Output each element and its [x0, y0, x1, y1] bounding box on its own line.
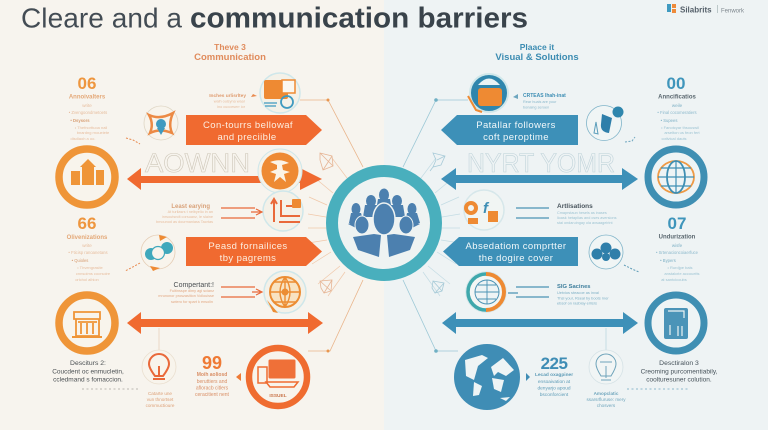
arrow: 225 pointer [526, 373, 530, 381]
panel: left item 06: 06 [78, 74, 96, 93]
icon: small cube lower left [320, 280, 332, 293]
icon: left building ring [59, 149, 115, 205]
icon: right globe ring [648, 149, 704, 205]
text block: description 2: Coucdent oc enmucletin, [52, 368, 124, 376]
callout: left least earying: inrsoutsndt corsuanz, le slaine [162, 215, 213, 219]
stat: 225: denyarjo apoud [537, 386, 571, 392]
radiating lines [308, 158, 460, 296]
icon: top right globe folder [468, 74, 508, 112]
banner: left lower [186, 237, 322, 266]
stat: 99: Moih aoliosd [197, 372, 227, 378]
icon: left institution ring [59, 295, 115, 351]
right column heading [495, 42, 579, 63]
panel: right item 07: anstalcrie accoueits [664, 271, 700, 276]
panel: right item 00: Anncificatios [658, 94, 696, 100]
callout: top left label: Inches urlisrltey [209, 93, 246, 99]
connector: left bulb [158, 328, 160, 350]
icon: right lower clouds [589, 235, 623, 269]
left column heading [194, 42, 266, 63]
divider: description 2 [82, 388, 140, 390]
right column heading: Plaace it [520, 42, 554, 52]
connector: bottom left [308, 280, 363, 352]
callout: top right label: CRTEAS lhah-inat [523, 93, 566, 99]
callout: left competent: swiero for spart k ensolin [171, 300, 213, 304]
icon: small cube upper right [430, 153, 445, 171]
panel: right item 07: • Rurdjpe bals [668, 265, 692, 270]
callout: right artifications: Cmaprstaun hesels as inases [557, 211, 607, 215]
panel: right item 00: weile [672, 103, 683, 108]
logo [667, 4, 745, 14]
outline lettering right: NYRT YOMR [467, 148, 615, 178]
arrow: left competent [221, 287, 262, 297]
text block: description 3 [641, 360, 718, 384]
text block: right bulb caption [586, 391, 626, 408]
callout: top left label: walh oulsyna waar [214, 100, 246, 104]
stat: 225: Lecad oxagpiner [535, 372, 573, 378]
icon: orange tree badge [258, 149, 302, 193]
panel: left item 06: • Dsysors [70, 118, 90, 123]
callout: right artifications: stai ondaruingay ola axsaageirint [557, 221, 613, 225]
title: Cleare and a [21, 2, 182, 34]
callout: right sig sacines [557, 284, 609, 306]
arrow: 99 pointer [236, 373, 241, 381]
panel: right item 00: cotivical dauts [661, 136, 687, 141]
icon: dashed pointer right lower [624, 265, 639, 272]
panel: right item 07: Undurization [659, 234, 696, 240]
text block: right bulb caption: Amopclatic [594, 391, 619, 396]
callout: right artifications: lioask hetaplias and cses aversions [557, 216, 617, 220]
text block: right bulb caption: chosvers [597, 403, 616, 408]
callout: left least earying: bmounod as dourmaniass Tacrtas [156, 220, 213, 224]
callout: top right label: Rear huals are your [523, 100, 557, 104]
callout: right sig sacines: Thsi your, Rseal by boots rner [557, 296, 609, 300]
icon: right badge [586, 106, 624, 140]
panel: left item 06: • Zvengoondmetoets [69, 110, 107, 115]
stat: 225: bsconforcient [540, 392, 569, 398]
callout: left competent: Compertant:! [174, 282, 214, 289]
panel: right item 07: • Bypers [660, 258, 676, 263]
panel: left item 06 [69, 74, 110, 141]
icon: laptop ring [249, 348, 307, 406]
right column heading: Visual & Solutions [495, 52, 579, 63]
banner: right lower: Absedatiom comprtter [466, 241, 566, 252]
arrow: top right label [513, 94, 518, 99]
left column heading: Communication [194, 52, 266, 63]
callout: left competent: mrunonor proszasltion Vollouisse [158, 294, 214, 298]
panel: right item 07: • Srtenacioncoiaerfuce [656, 250, 699, 255]
banner: left top: and preciible [217, 132, 277, 143]
callout: right artifications [557, 203, 617, 225]
panel: left item 66: • Fticisp ranoanetans [68, 250, 108, 255]
stat: 225: ensoaivation at [538, 379, 571, 385]
callout: right artifications: Artlisations [557, 203, 593, 210]
arrow: left lower double [127, 312, 323, 334]
panel: right item 00 [657, 74, 701, 141]
arrow: right sig sacines [508, 287, 549, 297]
icon: dashed pointer right [625, 137, 635, 142]
icon: dashed pointer left lower [125, 263, 140, 271]
icon: small cube lower right [432, 281, 444, 293]
callout: left competent: Fultinsspe dimy agl scianz [170, 289, 214, 293]
callout: right sig sacines: SIG Sacines [557, 284, 591, 290]
panel: left item 66: cnnsoims cocrsoire [76, 271, 111, 276]
banner: left lower: tby pagrems [220, 253, 276, 264]
icon: small cube upper left [320, 153, 333, 170]
stat: 99: afloracb citlers [196, 386, 229, 392]
banner: left lower: Peasd fornailices [208, 241, 288, 252]
stat: 225: 225 [541, 354, 567, 373]
text block: description 2 [52, 360, 124, 384]
logo: Fenwork [721, 8, 745, 14]
connector: bottom right [403, 280, 458, 353]
icon: dashed pointer left [126, 138, 140, 144]
title [21, 2, 528, 34]
text block: left bulb caption [146, 391, 175, 408]
central hub [332, 171, 436, 275]
callout: left least earying: Least earying [171, 204, 210, 210]
arrow: top left label [251, 94, 257, 97]
panel: left item 66: 66 [78, 214, 96, 233]
panel: right item 00: • Final cocomeratiers [657, 110, 697, 115]
banner: right top [441, 115, 578, 145]
icon: group of people [348, 188, 420, 257]
callout: top left label: ino cucceserr ior [217, 105, 246, 109]
panel: left item 06: write [82, 103, 92, 108]
icon: right device ring [648, 295, 704, 351]
arrow: right upper double [441, 168, 638, 190]
text block: description 3: Creoming purcomentiabily, [641, 368, 718, 376]
callout: left least earying [156, 204, 213, 224]
panel: left item 66: orlchol alhion [75, 277, 99, 282]
panel: right item 07: at santcicoubs [661, 277, 687, 282]
banner: right top: coft peroptime [483, 132, 549, 143]
stat: 99: ceracitient nent [195, 392, 230, 398]
callout: top right label: bonaing seroen [523, 106, 549, 110]
icon: left badge [144, 106, 178, 140]
icon: left globe [264, 271, 306, 313]
banner: right top: Patallar followers [476, 120, 556, 131]
icon: world globe [454, 344, 520, 410]
panel: left item 06: bnardng rnoueiete [77, 130, 110, 135]
title: communication barriers [190, 2, 528, 34]
icon: laptop ring: ISSUEL [269, 393, 287, 399]
text block: right bulb caption: ssarsrfluruse: mery [586, 397, 626, 402]
panel: right item 00: 00 [667, 74, 685, 93]
callout: left least earying: At turllasrs t nelbyelio in an [168, 210, 213, 214]
banner: left top [186, 115, 322, 145]
panel: left item 66: • Thvengrasite [77, 265, 104, 270]
panel: right item 07: 07 [668, 214, 686, 233]
text block: description 2: ccledmand s fomaccion. [53, 376, 123, 384]
icon: top left document [260, 73, 300, 113]
text block: description 3: Desctiralon 3 [659, 360, 699, 367]
panel: right item 00: arselton us feon fert [664, 130, 701, 135]
banner: right lower: the dogire cover [479, 253, 553, 264]
stat: 99 [195, 353, 230, 398]
icon: right gear [464, 190, 504, 230]
icon: right gear: f [483, 200, 490, 217]
text block: left bulb caption: vun thnortset [147, 397, 174, 402]
text block: description 2: Desciturs 2: [70, 360, 106, 367]
icon: right bulb [589, 350, 623, 384]
icon: left bulb [142, 350, 176, 384]
arrow: right lower double [442, 312, 638, 334]
panel: right item 00: • Fanotcyar thsouswil [661, 125, 699, 130]
icon: lower flow diagram [263, 191, 303, 231]
panel: left item 66 [67, 214, 111, 282]
stat: 99: 99 [202, 353, 222, 373]
panel: left item 66: Olivenizations [67, 235, 108, 241]
text block: description 3: coolturesuner colution. [646, 376, 712, 384]
arrow: left upper double [127, 168, 322, 190]
icon: right globe [466, 272, 506, 312]
callout: top right label [523, 93, 566, 110]
panel: left item 06: disdlaoh a oo. [71, 136, 95, 141]
divider: description 3 [627, 388, 690, 390]
callout: top left label [209, 93, 246, 109]
icon: left lower clouds [141, 235, 175, 271]
left column heading: Theve 3 [214, 42, 246, 52]
connector: right bulb [605, 328, 607, 350]
panel: right item 00: • Supees [661, 118, 677, 123]
text block: left bulb caption: Catarte une [148, 391, 172, 396]
stat: 225 [535, 354, 573, 398]
arrow: right artifications [516, 208, 549, 218]
callout: right sig sacines: ebsof on rasblay erlisrs [557, 300, 597, 306]
banner: right lower [443, 237, 578, 266]
stat: 99: beruttiers and [197, 379, 228, 385]
panel: left item 66: • Quioles [72, 258, 88, 263]
callout: left competent [158, 282, 214, 304]
panel: left item 06: Annoivalters [69, 94, 106, 100]
panel: right item 07 [656, 214, 700, 282]
arrow: left least earying [221, 208, 262, 218]
outline lettering left: AOWNN [145, 148, 250, 178]
logo: Silabrits [680, 6, 712, 14]
panel: left item 66: write [82, 243, 92, 248]
callout: right sig sacines: Uetvios steacoe as inval [557, 290, 599, 295]
connector: top right [403, 98, 468, 167]
banner: left top: Con-tourrs bellowaf [203, 120, 293, 131]
text block: left bulb caption: commuctioure [146, 403, 175, 408]
connector: top left [300, 98, 363, 167]
panel: right item 07: wisfe [672, 243, 683, 248]
panel: left item 06: • Thefnorttuoa nail [75, 125, 107, 130]
